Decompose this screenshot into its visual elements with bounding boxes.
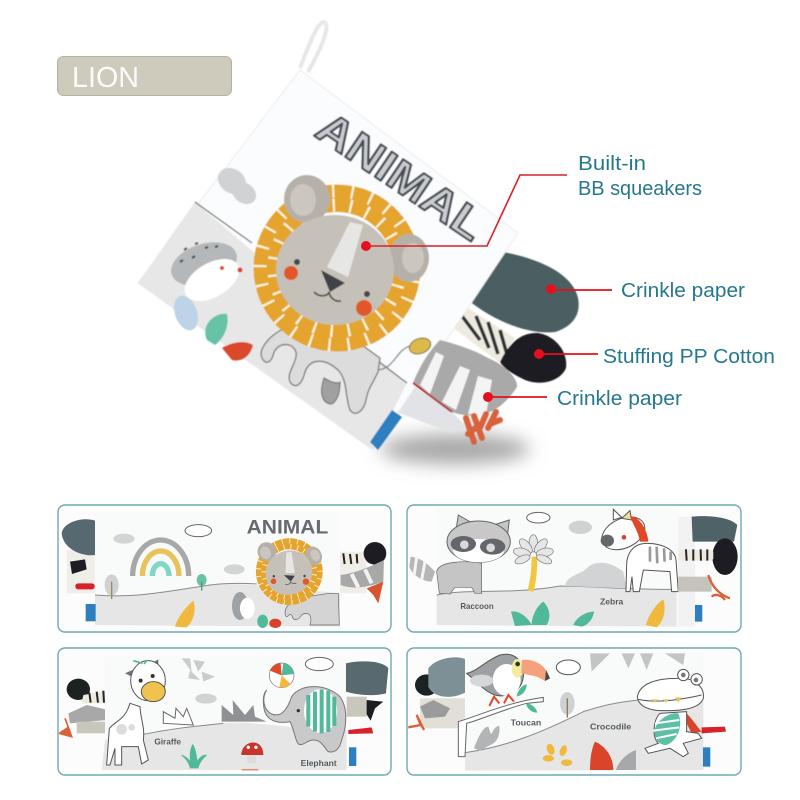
bush: [565, 563, 627, 588]
raccoon: [409, 515, 510, 594]
plush tail: black: [500, 333, 566, 383]
blue label tag: [370, 410, 402, 450]
callout: Stuffing PP Cotton: [534, 346, 775, 368]
hanging loop: [300, 22, 326, 72]
mesh crinkle corner: [396, 382, 468, 432]
callout: Crinkle paper bottom: [483, 388, 682, 410]
main product: animal cloth book: [138, 22, 579, 464]
shadow under book: [380, 434, 530, 464]
left plush tails: [408, 657, 467, 730]
plush tail: striped zebra: [452, 308, 515, 363]
plush tail: grey and white stripes: [413, 340, 517, 415]
ground area: [138, 202, 407, 450]
lion body: [285, 593, 339, 625]
clouds: [527, 512, 592, 534]
open book spread: [95, 550, 96, 594]
blue tag: [703, 747, 710, 767]
cloud: [556, 660, 580, 675]
plush tail: dark teal: [468, 252, 579, 332]
background leaves: [163, 658, 267, 725]
teal plant: [181, 744, 207, 768]
open book spread: [437, 508, 678, 627]
left plush tails: [62, 519, 97, 593]
lion head: [256, 538, 323, 605]
hedgehog: [232, 592, 255, 620]
orange tassel: [466, 412, 500, 442]
yellow plant: [543, 743, 572, 766]
panel: raccoon and zebra spread: [407, 505, 741, 632]
lion body outline: [261, 320, 433, 413]
palm tree: [513, 535, 554, 592]
cloud: [305, 657, 333, 671]
heading ANIMAL: ANIMAL: [247, 517, 329, 538]
back page edge and tag: [678, 517, 702, 627]
right plush tails: [340, 542, 386, 603]
blue tag: [349, 747, 356, 766]
callout: Built-in BB squeakers: BB squeakers: [578, 178, 702, 200]
callout: Stuffing PP Cotton: Stuffing PP Cotton: [603, 346, 775, 368]
book page: [138, 70, 518, 450]
elephant: [263, 687, 346, 752]
crocodile: [637, 669, 703, 757]
callout: Crinkle paper bottom: Crinkle paper: [557, 388, 682, 410]
callout: Built-in BB squeakers: [361, 153, 702, 251]
small leaves: [257, 615, 281, 628]
ground: [437, 586, 677, 627]
branch and toucan: [458, 654, 550, 757]
ground: [465, 700, 703, 771]
tree: [560, 692, 575, 718]
leaves: [170, 292, 253, 360]
tag: LION: LION: [72, 62, 139, 94]
callout: Crinkle paper top: [546, 280, 745, 302]
ground: [102, 723, 347, 770]
open book spread: [465, 653, 703, 770]
blue tag: [86, 604, 96, 621]
title: ANIMAL: ANIMAL: [307, 103, 494, 251]
lion head plush: [260, 175, 429, 345]
mushroom: [241, 742, 263, 763]
cloud: [213, 163, 260, 209]
rainbow: [133, 540, 189, 576]
callout: Built-in BB squeakers: Built-in: [578, 153, 646, 175]
right plush tails: [346, 661, 388, 734]
zebra: [597, 509, 678, 592]
label Zebra: Zebra: [600, 597, 624, 607]
tag: LION: [58, 56, 232, 96]
clouds: [113, 525, 245, 574]
label Crocodile: Crocodile: [590, 721, 632, 731]
red underline: [242, 768, 258, 771]
hedgehog: [165, 234, 246, 310]
leaves: [511, 599, 665, 627]
right plush tails: [678, 516, 738, 600]
label Giraffe: Giraffe: [154, 736, 181, 746]
giraffe: [107, 659, 165, 765]
beach ball: [269, 663, 294, 688]
lower leaf shapes: [474, 726, 636, 770]
panel: toucan and crocodile spread: [407, 648, 741, 775]
panel: cover spread with rainbow and lion: [58, 505, 391, 632]
label Raccoon: Raccoon: [460, 601, 494, 611]
top leaves: [590, 653, 685, 672]
red crinkle: [702, 727, 726, 733]
label Elephant: Elephant: [301, 758, 337, 768]
open book spread: [105, 690, 110, 734]
ground: [95, 584, 340, 627]
callout: Crinkle paper top: Crinkle paper: [621, 280, 745, 302]
trees: [105, 574, 207, 599]
panel: giraffe and elephant spread: [58, 648, 391, 775]
yellow leaf: [175, 601, 195, 627]
left plush tails: [59, 679, 110, 737]
label Toucan: Toucan: [511, 718, 541, 728]
